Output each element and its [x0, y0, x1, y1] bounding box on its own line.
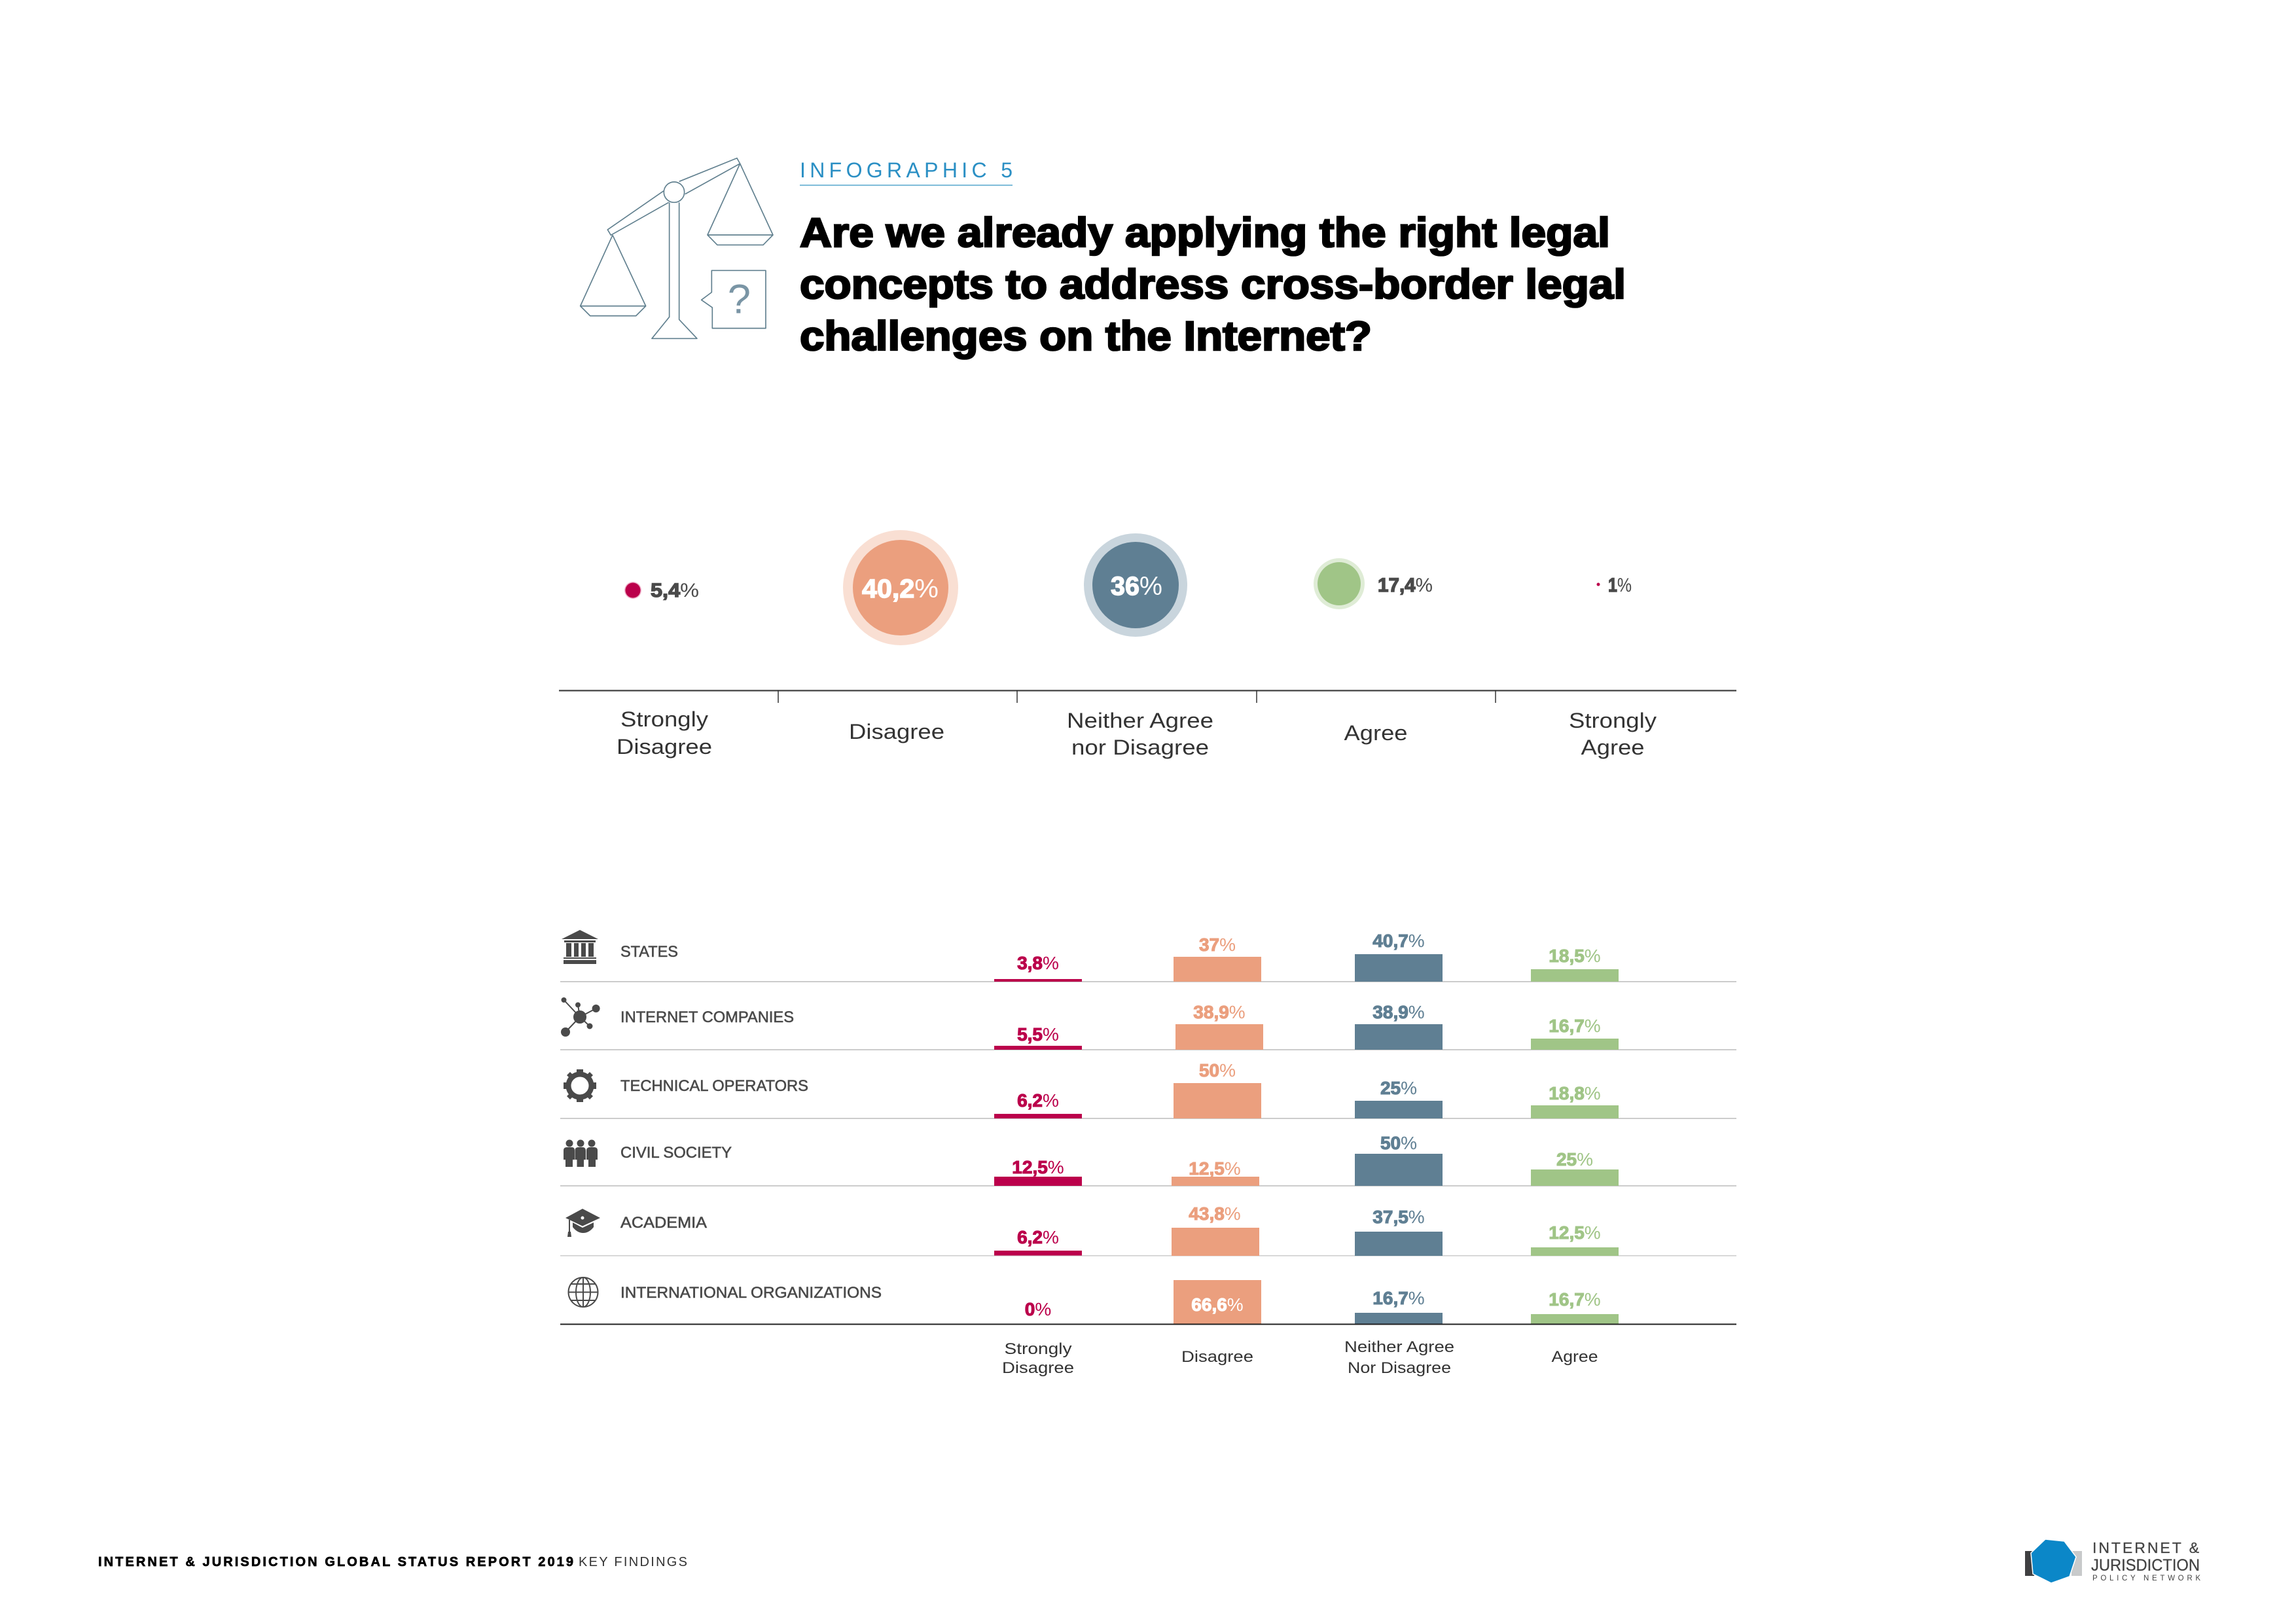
row: academia: 12,5% — [1549, 1222, 1601, 1243]
axis labels: overall scale — [617, 707, 1657, 759]
bubble: strongly disagree 5,4%: 5,4% — [651, 580, 699, 601]
row: technical operators: 50% — [1199, 1060, 1236, 1080]
title: challenges on the Internet? — [800, 313, 1372, 359]
logo: internet and jurisdiction policy network: INTERNET & — [2092, 1539, 2199, 1556]
row: academia: 6,2% — [1017, 1227, 1059, 1247]
row: states: 37% — [1199, 935, 1236, 955]
row: civil society: 12,5% — [1012, 1157, 1064, 1177]
icon: balance scale with question bubble — [581, 158, 773, 338]
row: international organizations: INTERNATIONAL ORGANIZATIONS — [620, 1284, 882, 1302]
footer text: INTERNET & JURISDICTION GLOBAL STATUS REPORT 2019 — [98, 1555, 573, 1569]
row: states: 18,5% — [1549, 946, 1601, 966]
bubble: disagree 40,2% — [843, 530, 958, 645]
axis labels: stakeholder chart: Neither Agree — [1344, 1338, 1454, 1356]
row: internet companies: 38,9% — [1193, 1002, 1246, 1022]
row: technical operators: 18,8% — [1549, 1083, 1601, 1103]
bubble: agree 17,4%: 17,4% — [1378, 575, 1433, 596]
logo: internet and jurisdiction policy network: JURISDICTION — [2091, 1556, 2200, 1575]
row: technical operators: 6,2% — [1017, 1090, 1059, 1111]
heading label: infographic 5: INFOGRAPHIC 5 — [800, 158, 1013, 182]
axis labels: stakeholder chart: Strongly — [1004, 1340, 1072, 1358]
axis labels: overall scale: Strongly — [620, 707, 708, 731]
row: internet companies: 38,9% — [1372, 1002, 1425, 1022]
bubble: neither 36%: 36% — [1111, 572, 1162, 601]
title — [800, 210, 1626, 359]
row: civil society: 25% — [1556, 1149, 1593, 1169]
row: states: 3,8% — [1017, 953, 1059, 973]
row: international organizations: 66,6% — [1191, 1294, 1244, 1315]
axis labels: overall scale: Agree — [1344, 721, 1407, 745]
row: states — [560, 930, 1736, 982]
icon: graduation cap — [565, 1209, 600, 1237]
logo: internet and jurisdiction policy network: POLICY NETWORK — [2092, 1575, 2200, 1582]
row: technical operators: 25% — [1380, 1078, 1417, 1098]
row: academia — [560, 1204, 1736, 1257]
bubble: agree 17,4% — [1314, 558, 1433, 609]
row: international organizations: 0% — [1025, 1299, 1051, 1319]
axis labels: overall scale: Disagree — [617, 735, 712, 758]
row: academia: 37,5% — [1372, 1207, 1425, 1227]
bubble: strongly disagree 5,4% — [624, 580, 699, 601]
icon: gear — [564, 1069, 596, 1102]
row: civil society — [560, 1133, 1736, 1186]
row: states: STATES — [620, 943, 678, 961]
icon: three people — [564, 1140, 598, 1167]
row: internet companies: 16,7% — [1549, 1016, 1601, 1036]
bubble: neither 36% — [1084, 533, 1187, 637]
axis labels: overall scale: Neither Agree — [1067, 709, 1213, 732]
title: concepts to address cross-border legal — [800, 262, 1626, 308]
axis labels: overall scale: Strongly — [1569, 709, 1657, 732]
row: internet companies: INTERNET COMPANIES — [620, 1008, 794, 1026]
axis labels: stakeholder chart: Agree — [1551, 1348, 1598, 1366]
axis labels: stakeholder chart: Nor Disagree — [1348, 1359, 1451, 1377]
row: academia: ACADEMIA — [620, 1214, 708, 1232]
row: internet companies — [560, 998, 1736, 1050]
icon: balance scale with question bubble: ? — [728, 277, 751, 323]
axis labels: overall scale: Agree — [1581, 736, 1644, 759]
row: internet companies: 5,5% — [1017, 1024, 1059, 1044]
icon: government building — [562, 930, 598, 964]
axis labels: stakeholder chart: Disagree — [1181, 1348, 1253, 1366]
footer text: KEY FINDINGS — [579, 1555, 687, 1569]
axis labels: overall scale: Disagree — [849, 720, 944, 743]
icon: globe — [568, 1277, 598, 1307]
row: civil society: 12,5% — [1189, 1158, 1241, 1179]
row: civil society: 50% — [1380, 1133, 1417, 1153]
axis labels: stakeholder chart — [1002, 1338, 1598, 1377]
logo: internet and jurisdiction policy network — [2025, 1539, 2200, 1583]
row: civil society: CIVIL SOCIETY — [620, 1144, 732, 1162]
icon: network nodes — [562, 998, 600, 1036]
row: international organizations: 16,7% — [1549, 1289, 1601, 1310]
panel: results by stakeholder group — [560, 930, 1736, 1325]
row: technical operators: TECHNICAL OPERATORS — [620, 1077, 808, 1095]
axis: overall scale with ticks — [559, 690, 1736, 703]
row: international organizations: 16,7% — [1372, 1288, 1425, 1308]
bubble: strongly agree 1%: 1% — [1608, 575, 1632, 596]
title: Are we already applying the right legal — [800, 210, 1610, 256]
panel: overall results bubbles — [624, 530, 1632, 645]
row: technical operators — [560, 1060, 1736, 1119]
row: states: 40,7% — [1372, 931, 1425, 951]
row: academia: 43,8% — [1189, 1204, 1241, 1224]
axis labels: overall scale: nor Disagree — [1071, 736, 1209, 759]
bubble: strongly agree 1% — [1597, 575, 1632, 596]
bubble: disagree 40,2%: 40,2% — [862, 575, 939, 603]
axis labels: stakeholder chart: Disagree — [1002, 1359, 1074, 1377]
row: international organizations — [560, 1277, 1736, 1325]
